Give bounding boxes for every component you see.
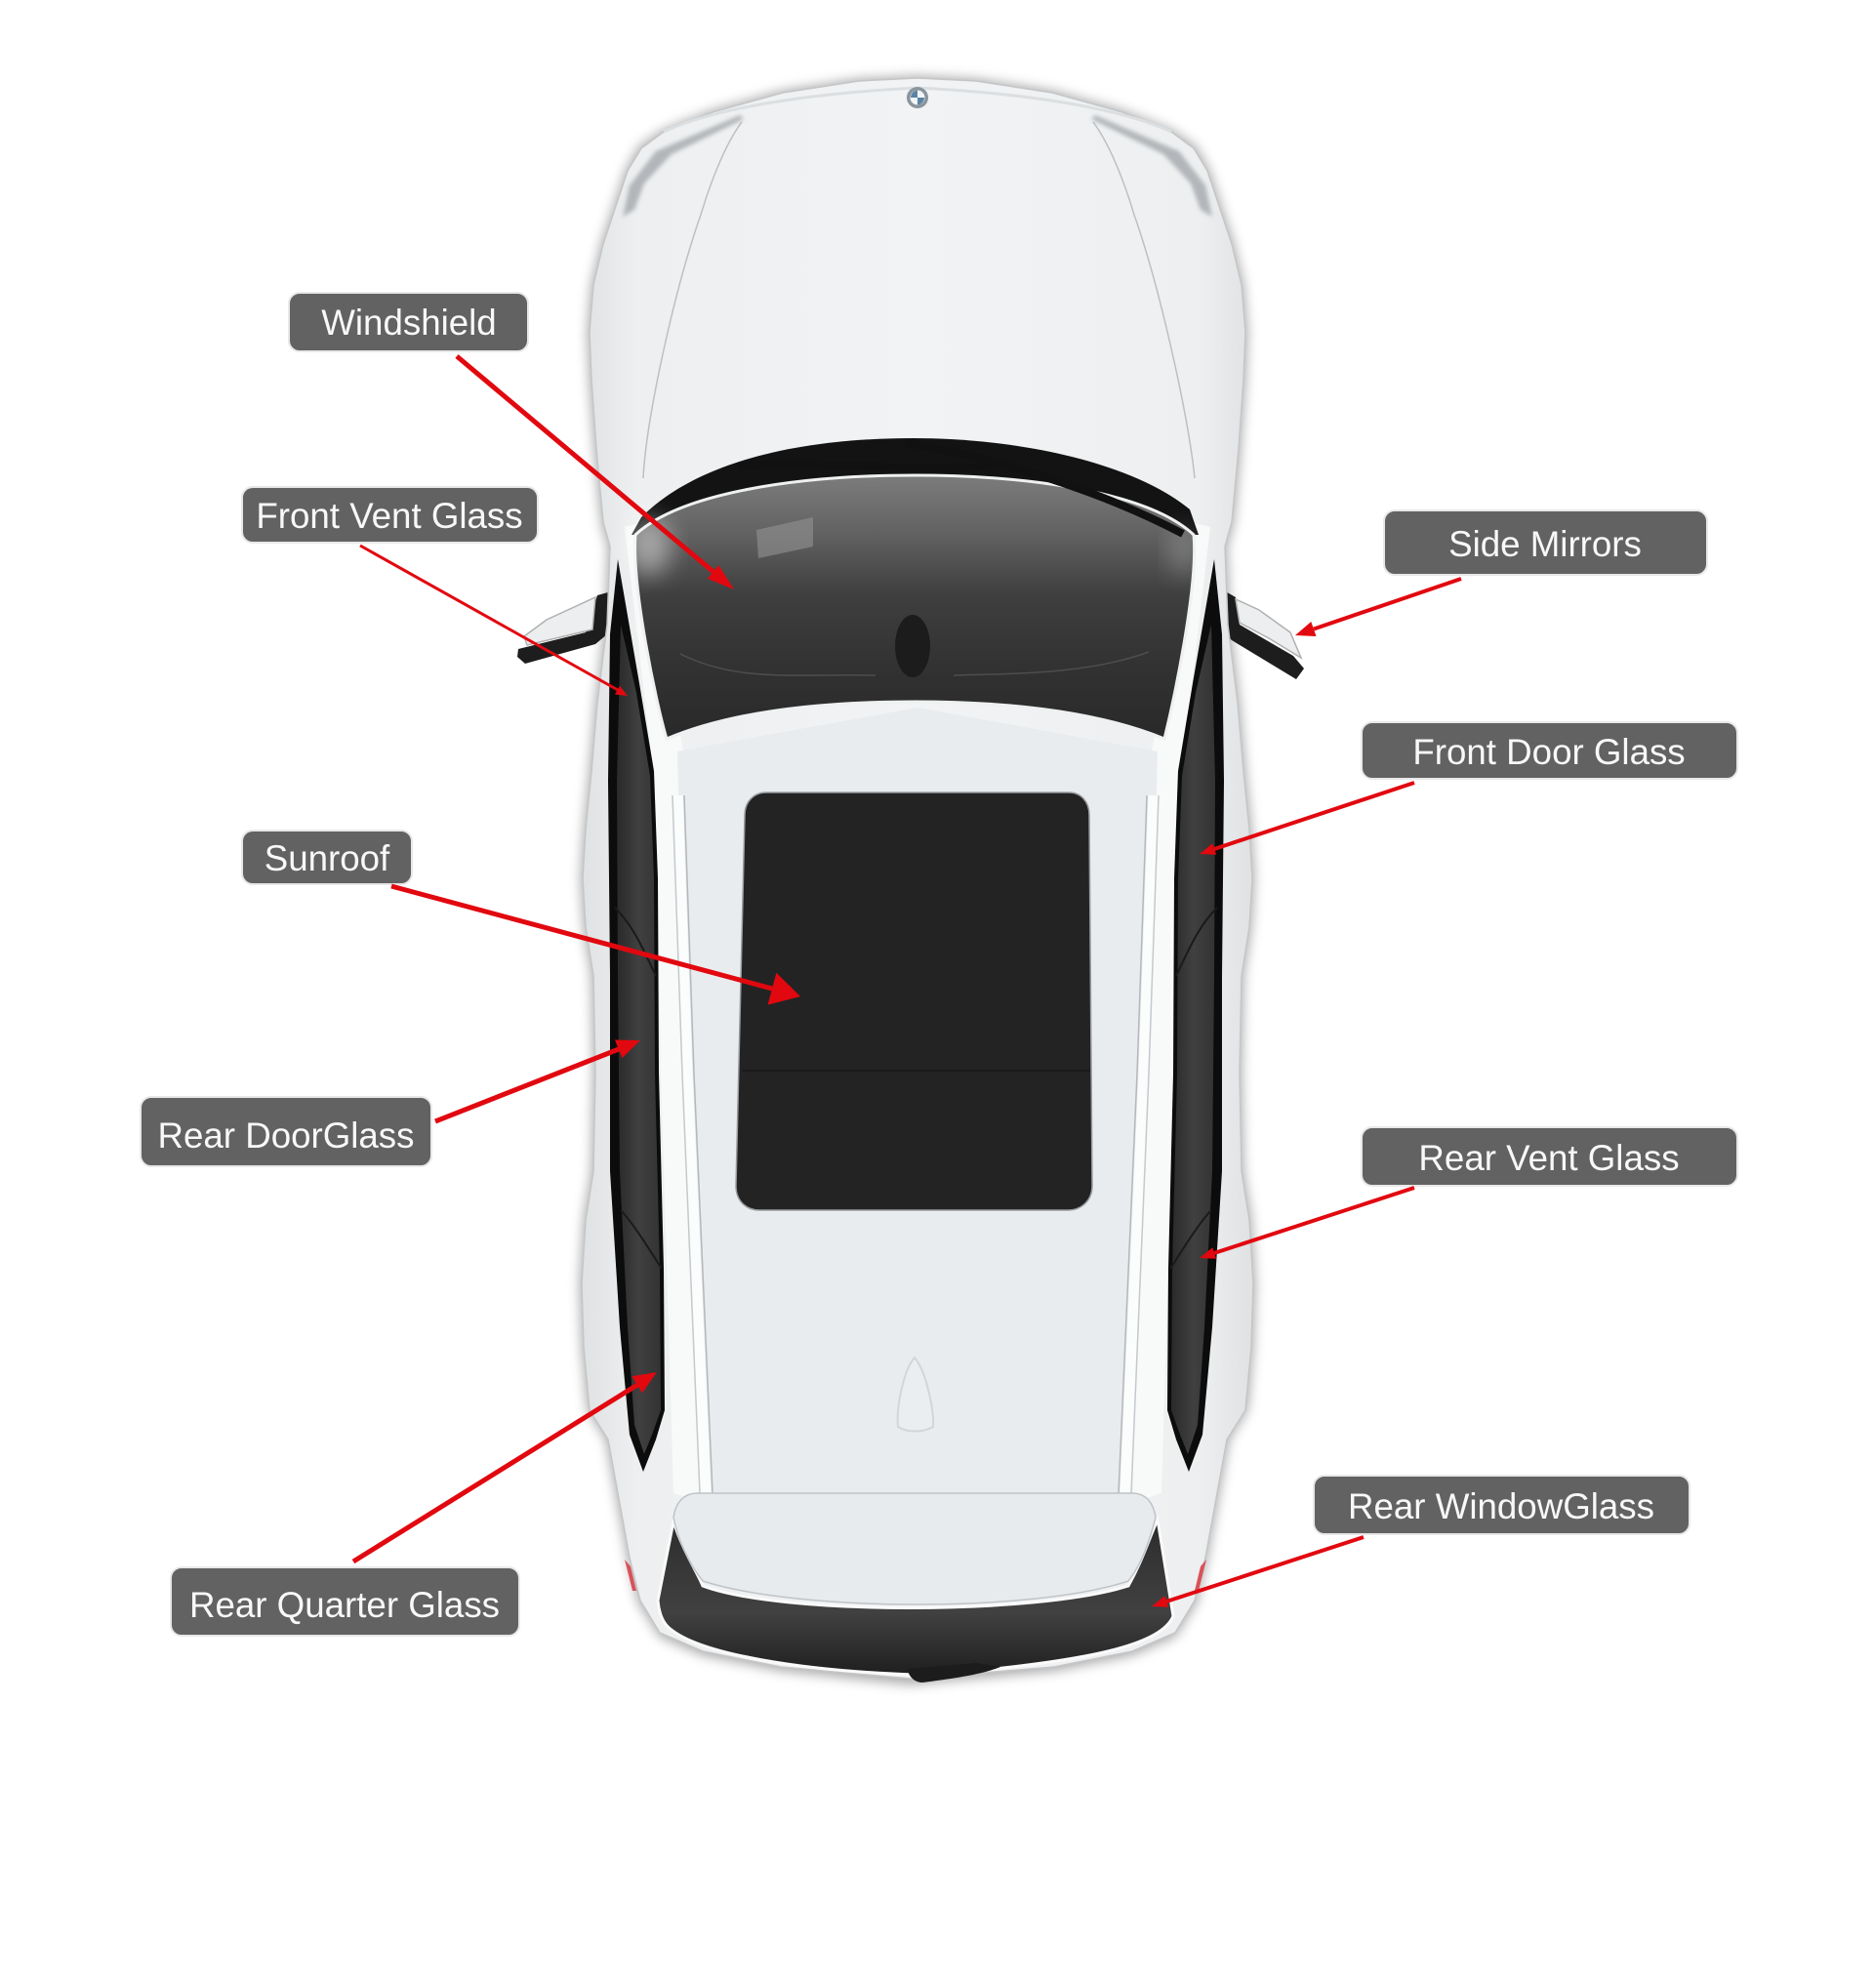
dashboard lines [680,652,1149,675]
icon: shark fin antenna [898,1358,933,1431]
label: Windshield: Windshield [321,303,497,343]
arrow: rear quarter glass [353,1372,657,1562]
arrow: sunroof [391,886,800,1005]
arrow: rear vent glass [1200,1188,1414,1259]
roof rails [672,795,1159,1493]
label: Rear DoorGlass [141,1097,431,1166]
windshield reflection right [1169,527,1197,576]
car top view [517,76,1304,1684]
label: Side Mirrors: Side Mirrors [1448,524,1642,564]
label: Rear WindowGlass: Rear WindowGlass [1348,1486,1654,1526]
arrow: front vent glass [360,546,628,696]
windshield sticker [756,517,813,558]
arrow: front door glass [1200,783,1414,855]
label: Front Vent Glass [242,487,538,543]
rearview mirror [895,615,930,677]
label: Rear Vent Glass: Rear Vent Glass [1418,1138,1680,1178]
icon: right headlight [1091,115,1212,217]
icon: hood logo [907,87,928,108]
panel: rear window glass [658,1520,1173,1675]
panel: roof [677,708,1158,1503]
label: Sunroof [242,831,412,884]
rear wiper [908,1663,1000,1683]
hood creases [643,122,742,478]
panel: sunroof [736,792,1092,1210]
car shadow [580,76,1255,1684]
label: Windshield [289,293,528,351]
label: Rear Vent Glass [1362,1127,1737,1186]
car body [582,78,1253,1679]
arrow: rear window glass [1152,1537,1364,1607]
label: Rear Quarter Glass: Rear Quarter Glass [189,1585,500,1625]
arrow: rear door glass [435,1040,640,1121]
label: Rear WindowGlass [1314,1476,1690,1534]
arrow: windshield [457,356,734,589]
label: Front Door Glass: Front Door Glass [1412,732,1686,772]
label: Side Mirrors [1384,510,1707,575]
windshield cowl [631,438,1199,535]
icon: left headlight [623,115,744,217]
label: Rear DoorGlass: Rear DoorGlass [157,1116,415,1156]
front vent and door glass, left [608,559,665,1472]
icon: right side mirror [1215,586,1304,679]
front vent and door glass, right [1167,559,1224,1472]
label: Sunroof: Sunroof [265,838,390,878]
icon: left side mirror [517,590,619,664]
panel: spoiler [673,1493,1156,1604]
wipers [739,443,1183,534]
taillights [625,1560,1206,1591]
a-pillars and side sills [625,522,1210,1503]
arrow: side mirrors [1295,579,1461,636]
windshield reflection left [628,517,671,576]
panel: windshield glass [628,475,1197,739]
label: Rear Quarter Glass [171,1567,519,1636]
label: Front Door Glass [1362,722,1737,779]
label: Front Vent Glass: Front Vent Glass [256,496,523,536]
